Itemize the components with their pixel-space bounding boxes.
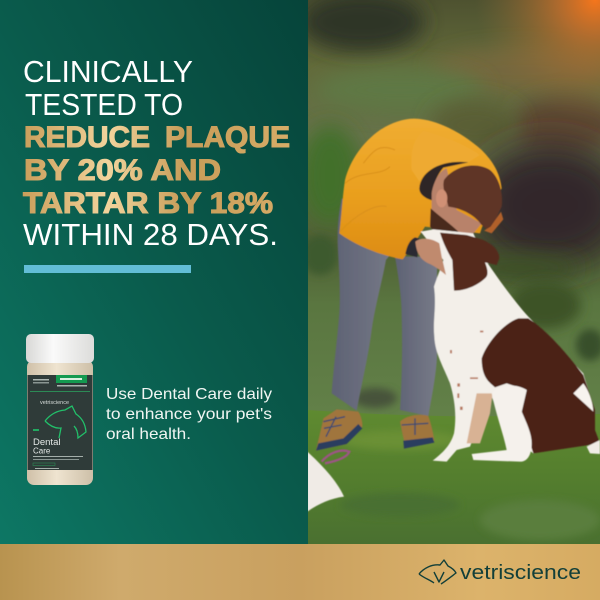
headline: TESTED TO <box>25 87 183 122</box>
headline: WITHIN 28 DAYS. <box>23 217 278 252</box>
body text: to enhance your pet's <box>106 406 272 423</box>
man: ear <box>436 189 447 207</box>
man: hair <box>443 166 502 232</box>
logo wordmark: vetriscience <box>460 562 581 584</box>
foreground white dog tail <box>307 452 344 512</box>
photo: man kissing dog on a hill at sunset <box>300 0 600 544</box>
man: cuff <box>405 237 419 257</box>
headline: CLINICALLY <box>23 54 193 89</box>
man: beard <box>430 208 458 232</box>
product bottle <box>26 334 94 485</box>
blue accent bar <box>24 265 191 273</box>
headline: REDUCE <box>24 121 150 154</box>
headline: PLAQUE <box>165 121 290 154</box>
dog: freckles <box>450 331 483 410</box>
man: collar <box>419 162 468 201</box>
body text: oral health. <box>106 426 191 443</box>
man: left leg <box>332 198 397 411</box>
bottle body <box>27 360 93 485</box>
man: neck and face <box>432 168 482 233</box>
body text: Use Dental Care daily <box>106 386 272 403</box>
dog: white body <box>421 229 595 462</box>
jacket: hood highlight <box>412 154 478 180</box>
man: shoes <box>316 409 434 451</box>
grass <box>308 410 600 544</box>
man: jacket <box>339 119 502 259</box>
dog: white back patch <box>573 383 593 412</box>
logo icon <box>419 560 456 584</box>
leash <box>322 451 349 463</box>
logo: vetriscience <box>419 560 581 584</box>
headline: BY 20% AND <box>24 154 221 187</box>
bottle cap <box>26 334 94 363</box>
body text <box>106 386 272 443</box>
bottle label: Care <box>33 446 51 456</box>
bottle label <box>28 375 92 470</box>
man: right leg <box>395 257 437 416</box>
bottle label: vetriscience <box>40 400 69 406</box>
headline: TARTAR BY 18% <box>23 187 273 220</box>
bottle label: Dental <box>33 437 60 448</box>
dog: brown patch <box>482 318 600 453</box>
dog: head <box>440 233 499 291</box>
dog: rear leg shadow <box>467 393 493 443</box>
panel: green background <box>0 0 308 544</box>
jacket: sleeve seams <box>346 147 395 210</box>
man: rim light <box>484 212 503 233</box>
headline <box>23 54 290 252</box>
dog: tail <box>587 440 600 454</box>
man: hand <box>415 239 446 275</box>
photo background <box>308 0 600 416</box>
dog: rear leg <box>472 386 532 462</box>
gold footer band <box>0 544 600 600</box>
